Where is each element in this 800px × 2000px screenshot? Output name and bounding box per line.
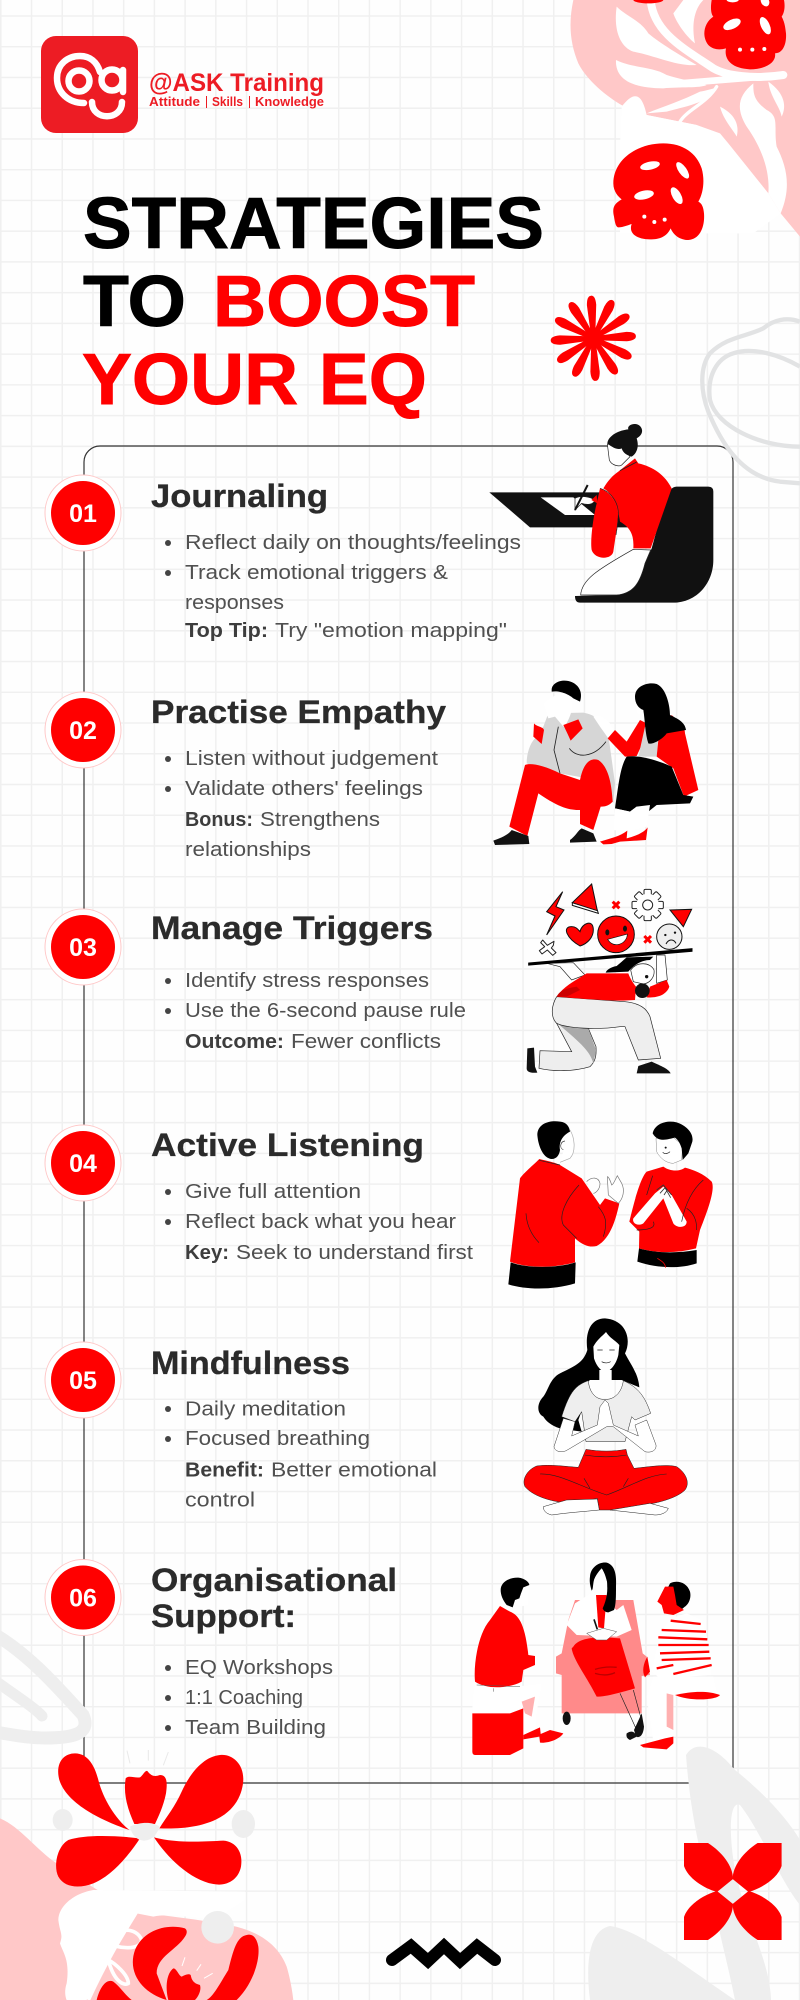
title: YOUR EQ <box>82 339 427 420</box>
step 05: Mindfulness <box>45 1342 437 1512</box>
bullet list: Give full attention <box>185 1181 361 1203</box>
step 03: Manage Triggers <box>45 909 466 1053</box>
bullet list: responses <box>185 592 284 614</box>
illustration: person carrying emotions on a plank <box>527 884 692 1073</box>
logo wordmark: @ASK Training <box>149 69 324 97</box>
title: STRATEGIES <box>83 183 544 264</box>
bullet list <box>165 1181 473 1264</box>
number badge 04: 04 <box>69 1150 97 1178</box>
bullet list: Use the 6-second pause rule <box>185 1000 466 1022</box>
heading: Journaling <box>151 478 328 514</box>
decoration: grey swirl left <box>0 1634 85 1738</box>
step 04: Active Listening <box>45 1125 473 1264</box>
number badge 01 <box>45 475 121 551</box>
decoration: bottom left pink blob and vine <box>0 1818 293 2000</box>
bullet list: Try "emotion mapping" <box>275 620 507 642</box>
number badge 05 <box>45 1342 121 1418</box>
bullet list: Strengthens <box>260 809 380 831</box>
bullet list: Top Tip: <box>185 620 268 642</box>
number badge 01: 01 <box>69 500 97 528</box>
bullet list: Fewer conflicts <box>291 1031 441 1053</box>
title <box>82 183 544 420</box>
bullet list: Identify stress responses <box>185 970 429 992</box>
decoration: top right vine and blob <box>571 0 800 237</box>
bullet list: Listen without judgement <box>185 748 439 770</box>
number badge 04 <box>45 1125 121 1201</box>
title: BOOST <box>213 261 475 342</box>
logo tagline: Skills <box>212 95 243 109</box>
illustration: woman writing at desk <box>489 424 713 603</box>
decoration: red starburst <box>550 295 636 381</box>
heading: Active Listening <box>151 1127 424 1163</box>
panel: timeline frame <box>84 446 733 1783</box>
bullet list <box>165 532 521 642</box>
decoration: red four-petal X <box>684 1843 782 1940</box>
bullet list: Bonus: <box>185 809 253 831</box>
heading: Manage Triggers <box>151 910 433 946</box>
step 02: Practise Empathy <box>45 692 446 861</box>
heading: Support: <box>151 1598 296 1634</box>
bullet list: Benefit: <box>185 1460 264 1482</box>
heading: Organisational <box>151 1562 397 1598</box>
logo icon <box>41 36 138 133</box>
bullet list: Reflect back what you hear <box>185 1211 456 1233</box>
bullet list: 1:1 Coaching <box>185 1687 303 1709</box>
bullet list: Reflect daily on thoughts/feelings <box>185 532 521 554</box>
bullet list <box>165 1657 333 1739</box>
decoration: black zigzag <box>392 1946 495 1961</box>
bullet list: Team Building <box>185 1717 326 1739</box>
number badge 02: 02 <box>69 717 97 745</box>
heading <box>151 1562 397 1634</box>
logo tagline: Attitude <box>149 95 200 109</box>
bullet list: relationships <box>185 839 311 861</box>
number badge 03 <box>45 909 121 985</box>
illustration: two people talking with hands <box>508 1121 713 1288</box>
number badge 05: 05 <box>69 1367 97 1395</box>
bullet list: Better emotional <box>271 1460 437 1482</box>
number badge 02 <box>45 692 121 768</box>
heading: Mindfulness <box>151 1345 350 1381</box>
bullet list: Daily meditation <box>185 1398 346 1420</box>
illustration: three people in a coaching session <box>472 1563 720 1755</box>
number badge 03: 03 <box>69 934 97 962</box>
decoration: grey curved band bottom right <box>588 1747 800 2000</box>
illustration: two people sitting and comforting <box>493 681 698 845</box>
decoration: top red skull blob <box>633 0 786 69</box>
bullet list: Focused breathing <box>185 1428 370 1450</box>
illustration: woman meditating <box>524 1318 687 1515</box>
logo tagline: Knowledge <box>255 95 324 109</box>
bullet list: Seek to understand first <box>236 1242 473 1264</box>
bullet list: EQ Workshops <box>185 1657 333 1679</box>
step 06: Organisational Support <box>45 1560 397 1739</box>
bullet list: Key: <box>185 1242 229 1264</box>
step 01: Journaling <box>45 475 521 642</box>
logo: @ASK Training <box>41 36 324 133</box>
decoration: bottom left lower red petals <box>97 1911 259 2000</box>
bullet list: control <box>185 1490 255 1512</box>
bullet list <box>165 748 439 861</box>
bullet list: Track emotional triggers & <box>185 562 449 584</box>
decoration: grey scribble loops <box>702 319 800 483</box>
heading: Practise Empathy <box>151 694 446 730</box>
logo tagline <box>149 95 324 109</box>
bullet list <box>165 1398 437 1512</box>
bullet list: Outcome: <box>185 1031 284 1053</box>
number badge 06: 06 <box>69 1584 97 1612</box>
bullet list <box>165 970 466 1053</box>
decoration: bottom left red flower <box>53 1750 255 1887</box>
title: TO <box>83 261 186 342</box>
decoration: middle red skull blob <box>613 143 704 240</box>
bullet list: Validate others' feelings <box>185 778 423 800</box>
number badge 06 <box>45 1560 121 1636</box>
